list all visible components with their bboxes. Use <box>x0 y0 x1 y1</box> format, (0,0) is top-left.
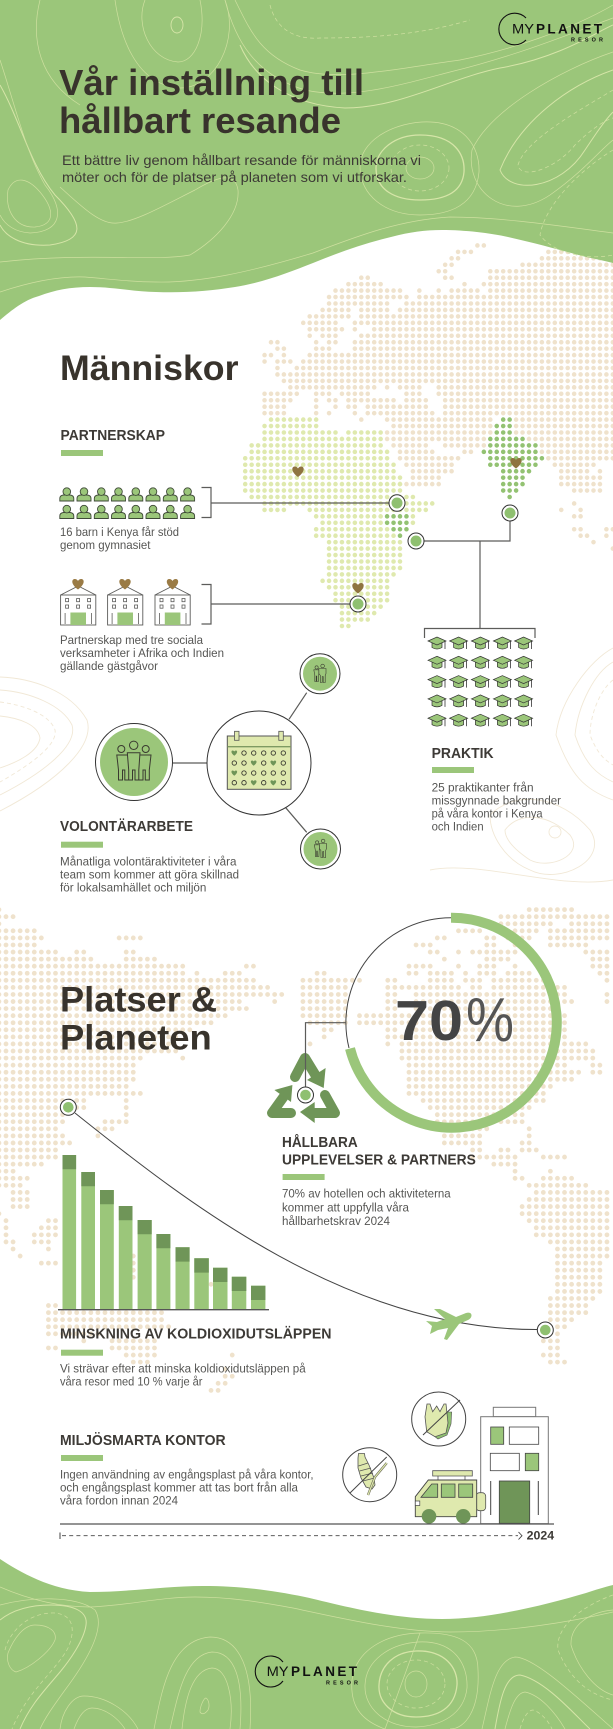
panel: praktik: PRAKTIK <box>432 746 494 762</box>
panel: volontärarbete: Månatliga volontäraktiviteter i våra <box>60 855 237 869</box>
panel: volontärarbete: team som kommer att göra skillnad <box>60 868 239 882</box>
subtitle: Ett bättre liv genom hållbart resande för människorna vi <box>62 152 421 168</box>
timeline to 2024: 2024 <box>527 1528 554 1542</box>
logo: MyPlanet bottom <box>255 1656 358 1687</box>
subheading: Partnerskap: PARTNERSKAP <box>60 428 165 444</box>
text: social enterprises: gällande gästgåvor <box>60 659 158 673</box>
connector: enterprises to South Africa <box>202 584 366 624</box>
panel: miljösmarta kontor: Ingen användning av engångsplast på våra kontor, <box>60 1468 314 1482</box>
panel: hållbara upplevelser: 70% av hotellen och aktiviteterna <box>282 1187 451 1201</box>
big number: 70 <box>395 989 463 1053</box>
panel: praktik: missgynnade bakgrunder <box>432 794 561 808</box>
icon: no plastic bottle <box>343 1448 397 1502</box>
map dots: Eurasia <box>265 245 613 549</box>
chart: 70% ring <box>346 918 557 1128</box>
title <box>59 62 364 141</box>
panel: minskning: våra resor med 10 % varje år <box>60 1375 202 1389</box>
connector: Kenya and India to interns <box>408 505 535 638</box>
footer contour lines <box>0 1587 613 1729</box>
logo: MyPlanet top <box>499 13 603 45</box>
icon: calendar <box>207 711 311 815</box>
logo: MyPlanet top: PLANET <box>536 22 603 36</box>
flight path with plane <box>60 1099 553 1340</box>
subtitle: möter och för de platser på planeten som vi utforskar. <box>62 169 407 185</box>
text: social enterprises: verksamheter i Afrika och Indien <box>60 646 224 660</box>
title: Vår inställning till <box>59 62 364 103</box>
icon: plane <box>426 1309 472 1340</box>
icon: hearts on map <box>292 458 522 594</box>
text: social enterprises <box>60 633 224 673</box>
panel: hållbara upplevelser: hållbarhetskrav 2024 <box>282 1214 390 1228</box>
text: social enterprises: Partnerskap med tre sociala <box>60 633 203 647</box>
panel: miljösmarta kontor: MILJÖSMARTA KONTOR <box>60 1432 226 1449</box>
panel: hållbara upplevelser: HÅLLBARA <box>282 1134 358 1151</box>
icon: van <box>415 1471 486 1524</box>
icons: three social enterprises <box>61 579 190 625</box>
text: 16 children: genom gymnasiet <box>60 538 151 552</box>
panel: miljösmarta kontor: våra fordon innan 2024 <box>60 1494 178 1508</box>
logo: MyPlanet top: RESOR <box>571 38 603 44</box>
icon: volunteer group <box>96 724 172 800</box>
text: 16 children: 16 barn i Kenya får stöd <box>60 525 179 539</box>
logo: MyPlanet top: MY <box>512 22 534 36</box>
icon: no plastic bag <box>412 1392 466 1446</box>
heading: Platser & Planeten: Platser & <box>60 981 217 1020</box>
icon grid: 16 children <box>60 488 195 518</box>
logo: MyPlanet bottom: RESOR <box>326 1680 358 1686</box>
panel: volontärarbete <box>60 818 239 895</box>
icon grid: 25 graduation caps <box>428 637 533 726</box>
panel: praktik: på våra kontor i Kenya <box>432 807 543 821</box>
logo: MyPlanet bottom: MY <box>267 1664 289 1679</box>
panel: volontärarbete: VOLONTÄRARBETE <box>60 818 193 835</box>
heading: Platser & Planeten: Planeten <box>60 1018 212 1057</box>
panel: hållbara upplevelser: UPPLEVELSER & PARTNERS <box>282 1152 476 1168</box>
footer green wave <box>0 1559 613 1729</box>
panel: praktik: och Indien <box>432 820 484 834</box>
chart: CO2 reduction bars <box>58 1155 269 1310</box>
decorative contours: middle right <box>430 648 613 882</box>
icon: small family top <box>300 654 340 694</box>
header green wave <box>0 0 613 320</box>
icon: recycling arrows <box>272 1023 346 1123</box>
text: 16 children <box>60 525 179 552</box>
panel: volontärarbete: för lokalsamhället och miljön <box>60 881 206 895</box>
panel: miljösmarta kontor <box>60 1432 314 1508</box>
heading: Platser & Planeten <box>60 981 217 1057</box>
panel: minskning: Vi strävar efter att minska koldioxidutsläppen på <box>60 1362 306 1376</box>
accent bar <box>61 450 103 456</box>
panel: miljösmarta kontor: och engångsplast kommer att tas bort från alla <box>60 1481 298 1495</box>
subtitle <box>62 152 421 185</box>
chart: 70% ring: % <box>466 986 514 1055</box>
connector: children to Kenya <box>202 488 405 518</box>
panel: minskning <box>60 1325 332 1389</box>
dotted world map: Europe, Asia and Africa <box>245 245 613 626</box>
diagram: volunteering hub <box>96 654 340 869</box>
header contour lines <box>0 0 613 292</box>
map dots: Africa <box>245 420 432 626</box>
decorative contours: middle left <box>0 677 88 811</box>
map dots: Kenya and India highlights <box>387 420 542 536</box>
panel: hållbara upplevelser <box>282 1134 476 1228</box>
timeline to 2024 <box>60 1524 554 1542</box>
icon: office building <box>481 1407 548 1524</box>
panel: praktik: 25 praktikanter från <box>432 781 534 795</box>
heading: Människor: Människor <box>60 349 239 388</box>
panel: hållbara upplevelser: kommer att uppfylla våra <box>282 1201 409 1215</box>
logo: MyPlanet bottom: PLANET <box>291 1664 358 1679</box>
icon: small family bottom <box>300 829 340 869</box>
panel: praktik <box>432 746 561 834</box>
panel: partnerskap <box>60 428 224 673</box>
dotted world map: second section <box>0 910 607 1390</box>
panel: minskning: MINSKNING AV KOLDIOXIDUTSLÄPPEN <box>60 1325 332 1342</box>
title: hållbart resande <box>59 100 341 141</box>
